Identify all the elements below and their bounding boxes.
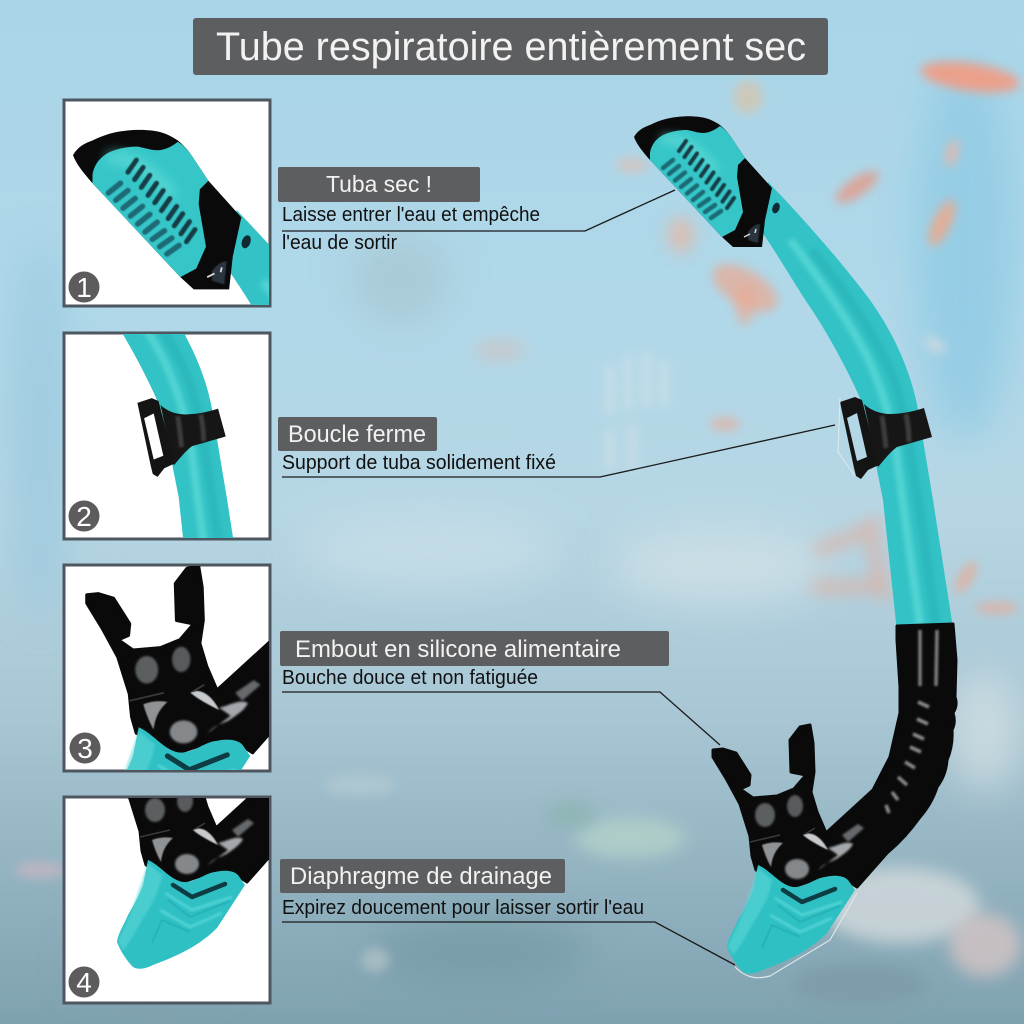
callout 1: tuba sec: Tuba sec ! [326, 171, 432, 197]
callout 3: embout en silicone [280, 631, 720, 745]
callout 2: boucle ferme: Support de tuba solidement fixé [282, 452, 556, 474]
callout 1: tuba sec: Laisse entrer l'eau et empêche [282, 204, 540, 226]
number badge 1: 1 [76, 272, 92, 303]
number badge 4: 4 [76, 967, 92, 998]
number badge 3 [70, 732, 100, 764]
callout 2: boucle ferme: Boucle ferme [288, 421, 426, 448]
panel 3: mouthpiece detail [62, 564, 272, 772]
title banner: Tube respiratoire entièrement sec [216, 25, 806, 69]
callout 4: diaphragme de drainage: Diaphragme de drainage [290, 863, 552, 890]
number badge 2: 2 [76, 501, 92, 532]
callout 1: tuba sec: l'eau de sortir [282, 232, 397, 254]
number badge 3: 3 [77, 733, 93, 764]
number badge 4 [68, 966, 100, 998]
panel 2: clip detail [62, 332, 272, 540]
callout 3: embout en silicone: Bouche douce et non fatiguée [282, 667, 538, 689]
snorkel [634, 116, 956, 978]
number badge 1 [68, 272, 100, 303]
panel 1: vent detail [62, 98, 272, 308]
callout 3: embout en silicone: Embout en silicone alimentaire [295, 636, 621, 663]
callout 2: boucle ferme [278, 417, 835, 477]
panel 4: drain valve detail [62, 796, 272, 1004]
number badge 2 [68, 500, 100, 532]
callout 1: tuba sec [278, 167, 675, 254]
callout 4: diaphragme de drainage: Expirez doucement pour laisser sortir l'eau [282, 897, 644, 919]
callout 4: diaphragme de drainage [280, 859, 735, 965]
